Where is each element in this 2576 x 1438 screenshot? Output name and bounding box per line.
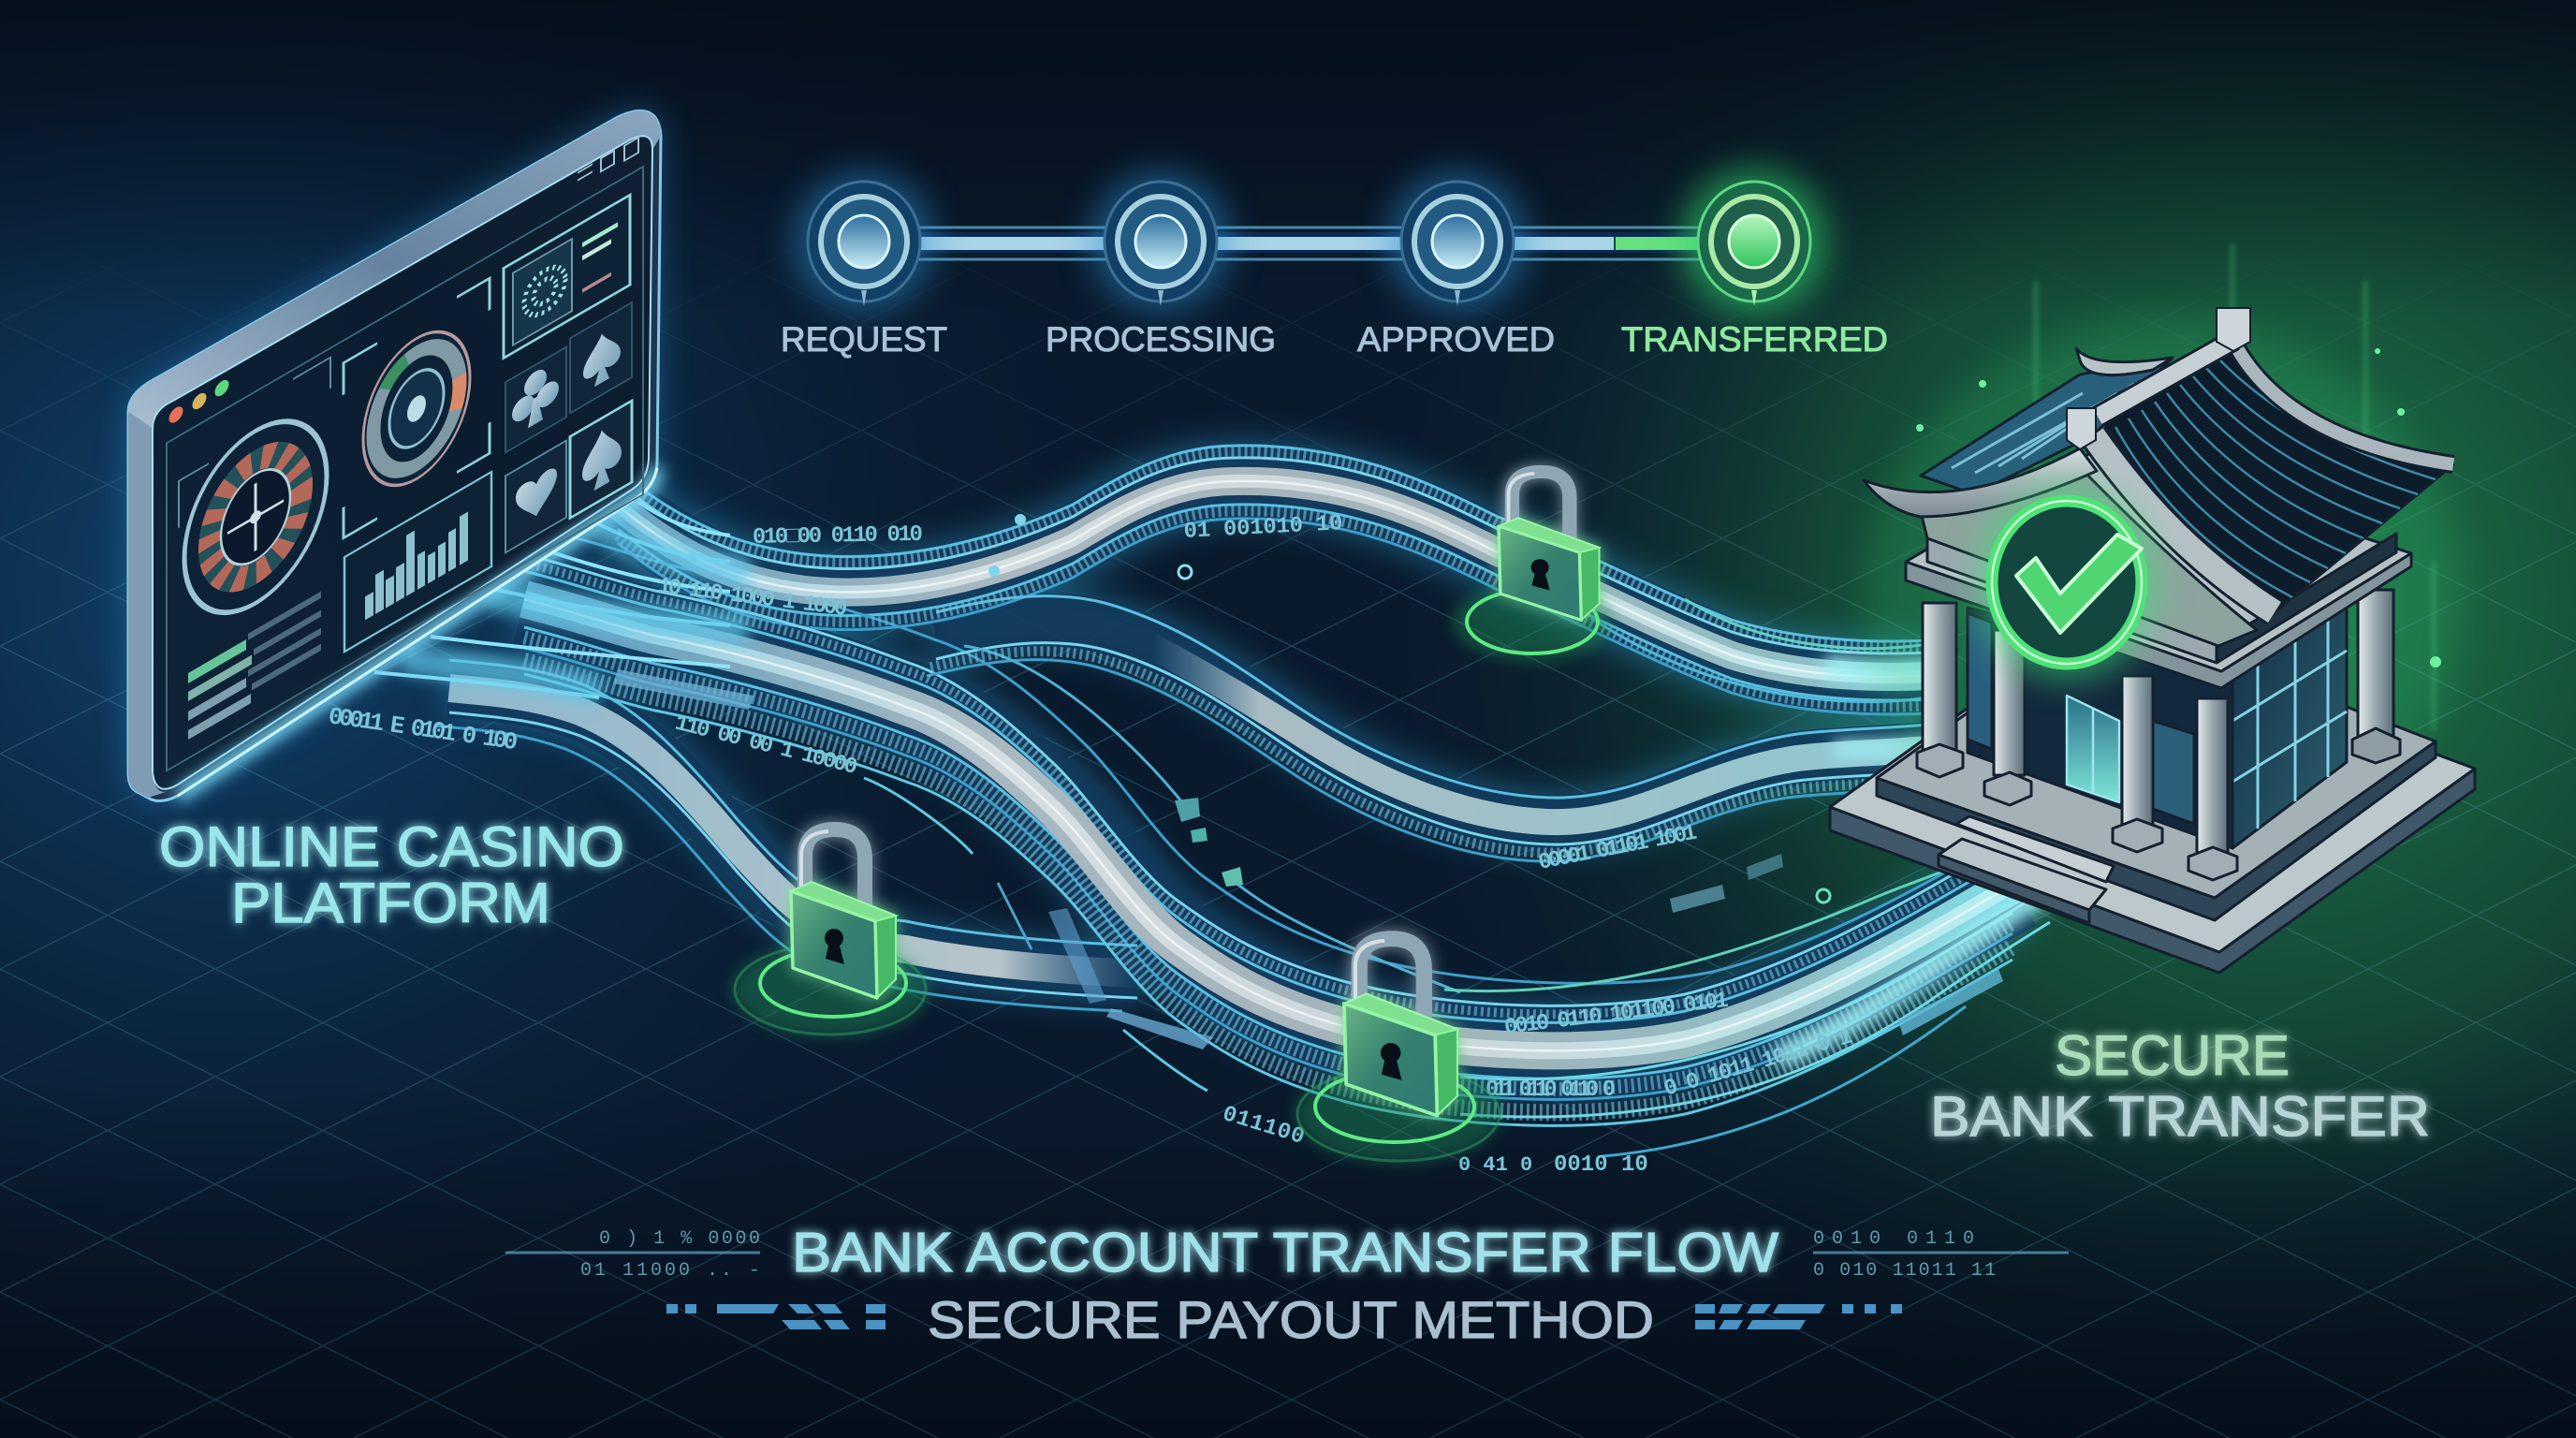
rear column bbox=[2352, 590, 2400, 763]
base plate bbox=[1830, 624, 2475, 973]
step: request bbox=[794, 171, 934, 312]
binary labels along streams: 010□00 0110 010 bbox=[753, 522, 923, 550]
check badge bbox=[1975, 485, 2159, 680]
inner frame bbox=[167, 167, 643, 770]
card: heart bbox=[505, 441, 566, 552]
bottom glowing edge bbox=[178, 468, 657, 796]
step: approved bbox=[1387, 171, 1528, 312]
left binary ornament: 01 11000 .. - bbox=[580, 1260, 760, 1282]
binary labels along streams: 011 0110 0110 0 bbox=[1486, 1078, 1616, 1103]
window dots bbox=[168, 377, 228, 426]
step labels bbox=[781, 320, 1888, 359]
tablet screen bbox=[153, 136, 652, 789]
step labels: TRANSFERRED bbox=[1621, 320, 1888, 359]
binary labels along streams: 0010 0110 101100 0101 bbox=[1503, 989, 1730, 1041]
stream: lower arcs into bank bbox=[1444, 599, 2050, 1156]
upper tier bbox=[1877, 613, 2436, 920]
green aura and sparks bbox=[1863, 243, 2462, 880]
front wall bbox=[1968, 608, 2232, 848]
step: processing bbox=[1090, 171, 1231, 312]
stream: data chips bbox=[613, 514, 2003, 1049]
bar chart panel bbox=[344, 472, 491, 652]
tablet top bevel bbox=[128, 110, 661, 429]
right binary ornament: 0010 0110 bbox=[1813, 1228, 1974, 1250]
gable front bbox=[1864, 448, 2257, 646]
door bbox=[2067, 696, 2119, 802]
binary labels along streams: 00011 E 0101 0 100 bbox=[327, 702, 520, 756]
platform label: PLATFORM bbox=[231, 872, 550, 934]
bank label: BANK TRANSFER bbox=[1930, 1085, 2430, 1148]
tablet glow bbox=[128, 110, 661, 801]
right roof bbox=[2067, 308, 2453, 612]
stream glow bbox=[449, 481, 2012, 1050]
locks bbox=[732, 472, 1612, 1163]
bank label: SECURE bbox=[2055, 1024, 2290, 1087]
card: club bbox=[505, 347, 566, 452]
tablet left side bbox=[128, 412, 168, 798]
progress stepper bbox=[781, 169, 1888, 359]
stream: flanking lines bbox=[434, 446, 2041, 1125]
title bbox=[505, 1222, 2069, 1349]
screen contents bbox=[167, 134, 643, 770]
card: spade highlighted bbox=[570, 401, 632, 518]
platform label: ONLINE CASINO bbox=[159, 815, 624, 878]
platform label bbox=[159, 815, 624, 934]
left binary ornament bbox=[505, 1228, 760, 1282]
binary labels along streams: 110 00 00 1 10000 bbox=[672, 712, 860, 781]
tablet body bbox=[128, 110, 661, 801]
lock: upper right bbox=[1453, 472, 1612, 661]
stream: lane backgrounds bbox=[449, 481, 2012, 1050]
stream: bright bank entry bbox=[1778, 665, 2050, 1058]
card: spade bbox=[570, 302, 632, 413]
columns bbox=[1917, 603, 2237, 880]
roulette wheel bbox=[184, 389, 327, 644]
step: transferred bbox=[1681, 169, 1827, 315]
lock: lower left bbox=[732, 829, 929, 1036]
rear roof bbox=[1921, 348, 2173, 494]
right chevrons bbox=[1695, 1304, 1902, 1329]
entablature bbox=[1906, 449, 2411, 688]
bank label bbox=[1930, 1024, 2430, 1148]
left chevrons bbox=[666, 1304, 886, 1329]
frame bracket bbox=[179, 358, 330, 528]
tablet: online casino platform bbox=[128, 110, 661, 801]
left binary ornament: 0 ) 1 % 0000 bbox=[599, 1228, 760, 1250]
bank building bbox=[1830, 243, 2475, 973]
window controls bbox=[578, 137, 638, 188]
right binary ornament: 0 010 11011 11 bbox=[1813, 1260, 1996, 1282]
step labels: PROCESSING bbox=[1046, 320, 1276, 359]
binary labels along streams: 011100 bbox=[1220, 1102, 1308, 1151]
lock: lower middle bbox=[1295, 939, 1501, 1163]
binary labels along streams: 01 001010 10 bbox=[1183, 511, 1343, 545]
stream: fan of rays leaving the tablet bbox=[374, 501, 730, 697]
title text: BANK ACCOUNT TRANSFER FLOW bbox=[792, 1222, 1778, 1284]
binary labels along streams: 0010 10 bbox=[1554, 1152, 1648, 1178]
binary labels along streams: 10 110 1000 1 1000 bbox=[656, 574, 849, 623]
data panel bbox=[504, 195, 630, 358]
binary labels along streams: 00001 01101 1001 bbox=[1536, 821, 1699, 876]
step labels: APPROVED bbox=[1357, 320, 1555, 359]
subtitle text: SECURE PAYOUT METHOD bbox=[928, 1290, 1654, 1349]
right binary ornament bbox=[1813, 1228, 2069, 1282]
steps bbox=[1939, 816, 2114, 923]
data streams bbox=[374, 446, 2050, 1156]
stream: silver bands bbox=[449, 481, 2012, 1050]
binary labels along streams: 0 41 0 bbox=[1458, 1153, 1532, 1177]
glass wall right bbox=[2232, 608, 2347, 848]
binary labels along streams bbox=[327, 511, 1855, 1178]
list rows bbox=[188, 592, 321, 740]
game wheel panel bbox=[344, 278, 490, 538]
step labels: REQUEST bbox=[781, 320, 947, 359]
binary labels along streams: 0 0 1011 1011 0 1 bbox=[1661, 1024, 1855, 1103]
stream: binary texture bands bbox=[524, 451, 2012, 1112]
connector rails bbox=[864, 227, 1754, 259]
